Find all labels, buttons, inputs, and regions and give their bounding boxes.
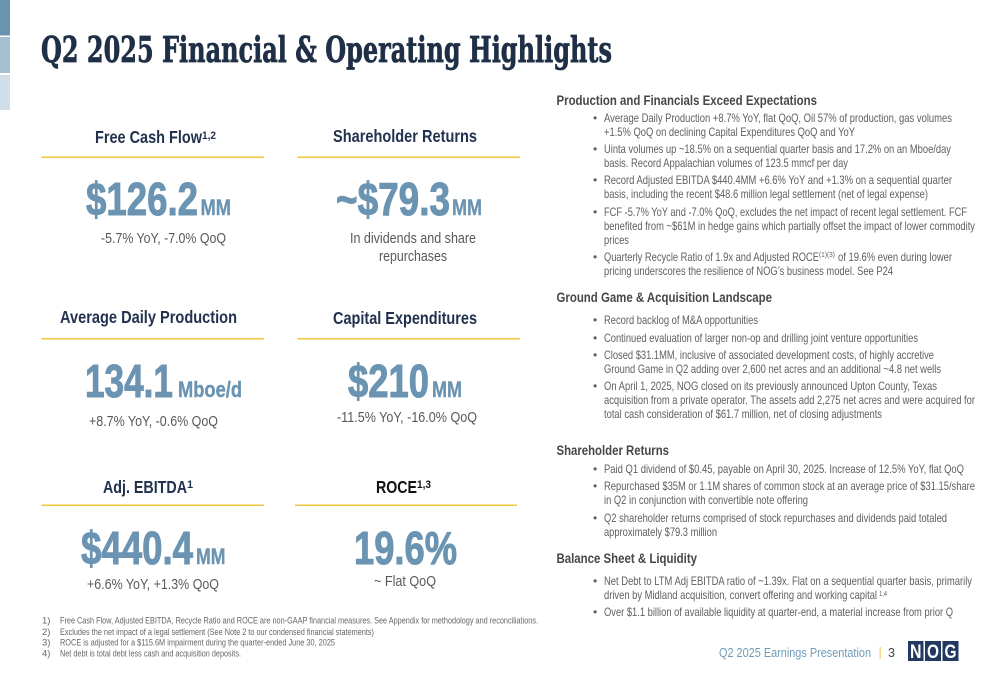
logo: NOG: O [927, 642, 939, 663]
panel: shareholder returns: In dividends and share [350, 230, 476, 247]
text block: ground game and acquisition landscape: • [593, 313, 597, 327]
text block: balance sheet and liquidity: driven by Midland acquisition, convert offering and working capital [604, 588, 877, 602]
text block: ground game and acquisition landscape: Ground Game & Acquisition Landscape [556, 290, 772, 305]
footnotes: 3) [42, 638, 50, 648]
text block: ground game and acquisition landscape: Continued evaluation of larger non-op and drilling joint venture opportunities [604, 331, 918, 345]
footnotes: 2) [42, 627, 50, 638]
footnotes: Net debt is total debt less cash and acquisition deposits. [60, 648, 241, 660]
footer: presentation label and page number: 3 [888, 646, 895, 660]
text block: shareholder returns: • [593, 479, 597, 493]
text block: ground game and acquisition landscape: • [593, 331, 597, 345]
panel: roce [295, 477, 517, 590]
title: Q2 2025 Financial & Operating Highlights [41, 30, 612, 71]
panel: shareholder returns: repurchases [379, 248, 447, 265]
text block: shareholder returns: Shareholder Returns [556, 443, 669, 458]
text block: production and financials: Production and Financials Exceed Expectations [556, 93, 817, 108]
text block: shareholder returns: in Q2 in conjunction with convertible note offering [604, 493, 808, 507]
logo: NOG [908, 641, 958, 663]
text block: ground game and acquisition landscape: • [593, 348, 597, 362]
panel: shareholder returns: ~$79.3 [336, 173, 450, 225]
panel: shareholder returns [298, 126, 520, 265]
text block: shareholder returns: • [593, 462, 597, 476]
text block: production and financials: (1)(3) [819, 250, 835, 259]
text block: ground game and acquisition landscape: total cash consideration of $61.7 million, net of closing adjustments [604, 407, 882, 421]
footnotes: 1) [42, 616, 50, 626]
text block: production and financials: pricing underscores the resilience of NOG’s business model. See P24 [604, 264, 893, 278]
panel: average daily production: +8.7% YoY, -0.6% QoQ [89, 413, 218, 430]
panel: average daily production: Average Daily Production [60, 307, 237, 327]
panel: roce: ~ Flat QoQ [374, 573, 436, 590]
text block: shareholder returns: • [593, 511, 597, 525]
panel: roce: 19.6% [354, 522, 457, 574]
text block: shareholder returns: approximately $79.3 million [604, 525, 717, 539]
text block: production and financials [556, 93, 975, 278]
panel: capital expenditures: MM [432, 377, 462, 402]
text block: production and financials: Quarterly Recycle Ratio of 1.9x and Adjusted ROCE [604, 250, 819, 264]
footnotes: ROCE is adjusted for a $115.6M impairment during the quarter-ended June 30, 2025 [60, 638, 335, 648]
text block: production and financials: of 19.6% even during lower [838, 250, 952, 264]
footnotes: Free Cash Flow, Adjusted EBITDA, Recycle Ratio and ROCE are non-GAAP financial measures. See Appendix for methodology and reconciliations. [60, 616, 538, 626]
panel: adjusted ebitda: +6.6% YoY, +1.3% QoQ [87, 576, 219, 593]
panel: average daily production: 134.1 [85, 355, 173, 407]
panel: free cash flow: MM [200, 195, 231, 220]
text block: production and financials: basis. Record Appalachian volumes of 123.5 mmcf per day [604, 156, 848, 170]
footnotes: 4) [42, 648, 50, 660]
panel: shareholder returns: MM [452, 195, 482, 220]
panel: capital expenditures: -11.5% YoY, -16.0% QoQ [337, 409, 477, 426]
panel: capital expenditures [298, 308, 520, 426]
footer: presentation label and page number: Q2 2025 Earnings Presentation [719, 646, 871, 660]
text block: production and financials: • [593, 173, 597, 187]
panel: adjusted ebitda: $440.4 [81, 522, 193, 574]
text block: balance sheet and liquidity: • [593, 574, 597, 588]
footnotes: Excludes the net impact of a legal settlement (See Note 2 to our condensed financial statements) [60, 627, 374, 638]
text block: production and financials: +1.5% QoQ on declining Capital Expenditures QoQ and YoY [604, 125, 855, 139]
panel: roce: 1,3 [417, 479, 431, 491]
panel: free cash flow: 1,2 [202, 130, 216, 142]
panel: free cash flow: Free Cash Flow [95, 127, 202, 147]
text block: production and financials: • [593, 205, 597, 219]
text block: production and financials: • [593, 250, 597, 264]
decorative corner blocks [0, 0, 10, 110]
panel: adjusted ebitda [42, 477, 264, 593]
text block: production and financials: • [593, 111, 597, 125]
panel: adjusted ebitda: 1 [187, 479, 193, 491]
panel: free cash flow: $126.2 [86, 173, 198, 225]
panel: average daily production [42, 307, 264, 430]
text block: balance sheet and liquidity: • [593, 605, 597, 619]
panel: average daily production: Mboe/d [178, 377, 242, 402]
panel: roce: ROCE [376, 477, 417, 497]
text block: shareholder returns [556, 443, 975, 539]
panel: adjusted ebitda: MM [196, 544, 226, 569]
panel: capital expenditures: Capital Expenditures [333, 308, 477, 328]
text block: balance sheet and liquidity: Balance Sheet & Liquidity [556, 551, 697, 566]
text block: balance sheet and liquidity [556, 551, 972, 619]
text block: ground game and acquisition landscape: • [593, 379, 597, 393]
logo: NOG: N [910, 642, 922, 663]
text block: production and financials: • [593, 142, 597, 156]
text block: ground game and acquisition landscape: Record backlog of M&A opportunities [604, 313, 758, 327]
text block: ground game and acquisition landscape [556, 290, 975, 421]
text block: production and financials: prices [604, 233, 629, 247]
text block: balance sheet and liquidity: 1,4 [879, 589, 887, 598]
panel: capital expenditures: $210 [348, 355, 429, 407]
logo: NOG: G [944, 642, 956, 663]
panel: adjusted ebitda: Adj. EBITDA [103, 477, 187, 497]
panel: free cash flow [42, 127, 264, 247]
panel: free cash flow: -5.7% YoY, -7.0% QoQ [101, 230, 226, 247]
footnotes [42, 616, 538, 660]
panel: shareholder returns: Shareholder Returns [333, 126, 477, 146]
